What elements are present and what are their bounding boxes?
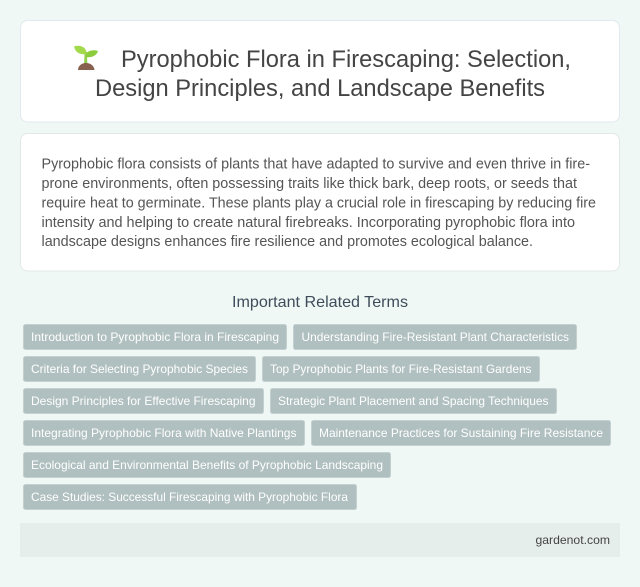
tag: Case Studies: Successful Firescaping with Pyrophobic Flora <box>31 490 348 504</box>
tag <box>24 484 356 510</box>
title: Design Principles, and Landscape Benefits <box>95 75 545 102</box>
text block: description: intensity and helping to create natural firebreaks. Incorporating pyrophobic flora into <box>42 215 575 231</box>
tag <box>312 420 610 446</box>
icon: seedling <box>74 46 98 70</box>
title: Pyrophobic Flora in Firescaping: Selection, <box>121 46 571 73</box>
tag: Introduction to Pyrophobic Flora in Firescaping <box>31 330 279 344</box>
tag <box>24 388 264 414</box>
title <box>95 46 571 102</box>
tag <box>24 420 304 446</box>
tag: Ecological and Environmental Benefits of Pyrophobic Landscaping <box>31 458 383 472</box>
tag <box>24 324 286 350</box>
footer text: gardenot.com <box>536 533 610 547</box>
text block: description: Pyrophobic flora consists of plants that have adapted to survive and even thrive in fire- <box>42 156 590 172</box>
text block: description: prone environments, often possessing traits like thick bark, deep roots, or seeds that <box>42 176 577 192</box>
tag list <box>24 324 610 510</box>
tag: Strategic Plant Placement and Spacing Techniques <box>278 394 548 408</box>
tag: Top Pyrophobic Plants for Fire-Resistant Gardens <box>270 362 532 376</box>
tag <box>262 356 540 382</box>
tag <box>270 388 556 414</box>
panel: introduction text <box>20 134 620 271</box>
panel: title card <box>20 20 620 122</box>
tag <box>24 356 256 382</box>
text block: description <box>42 156 596 250</box>
tag: Design Principles for Effective Firescaping <box>31 394 256 408</box>
heading: related terms: Important Related Terms <box>232 294 408 311</box>
tag: Integrating Pyrophobic Flora with Native Plantings <box>31 426 296 440</box>
tag <box>24 452 390 478</box>
tag: Understanding Fire-Resistant Plant Characteristics <box>302 330 569 344</box>
text block: description: landscape designs enhances fire resilience and promotes ecological balance. <box>42 234 533 250</box>
footer <box>20 523 620 557</box>
text block: description: require heat to germinate. These plants play a crucial role in firescaping by reducing fire <box>42 196 596 212</box>
tag <box>294 324 576 350</box>
tag: Criteria for Selecting Pyrophobic Species <box>31 362 248 376</box>
tag: Maintenance Practices for Sustaining Fire Resistance <box>319 426 603 440</box>
